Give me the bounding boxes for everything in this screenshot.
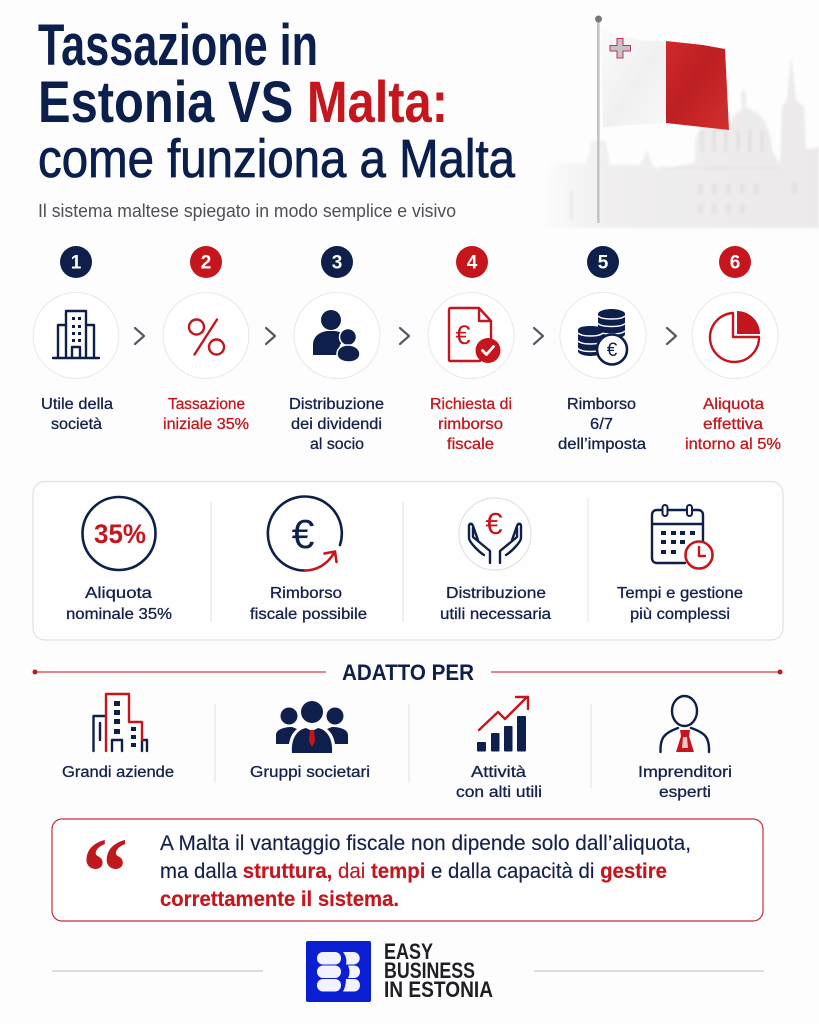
title: come funziona a Malta [38,129,516,189]
step 6: effettiva [703,416,763,433]
fact: profit distribution: Distribuzione [446,585,546,602]
step 5: dell’imposta [558,436,646,453]
step 3: al socio [310,436,364,453]
footer: logo Easy Business in Estonia: IN ESTONIA [384,977,493,1002]
fact: tax refund [250,497,367,623]
callout: quote: ma dalla struttura, dai tempi e dalla capacità di gestire [160,860,667,883]
Maltese cross [610,38,630,58]
callout: quote [52,818,763,925]
step 4: 4 [467,252,478,274]
flag of Malta with pole [595,16,729,223]
audience: corporate groups: Gruppi societari [250,764,370,781]
icon: pie chart [710,311,760,362]
step 1: 1 [71,252,82,274]
step 6: intorno al 5% [685,436,781,453]
step 4: fiscale [447,436,494,453]
heading: ADATTO PER: ADATTO PER [342,660,474,685]
audience: expert entrepreneurs [638,696,732,801]
title: Tassazione in [38,13,318,78]
audience: large companies [62,694,174,781]
fact: tax refund: € [292,511,315,557]
audience: expert entrepreneurs: Imprenditori [638,764,732,781]
arrow 4 [534,328,543,344]
panel: key facts [33,482,783,640]
step 2: Tassazione [168,396,245,413]
icon: percent [189,320,224,354]
step 3: dei dividendi [291,416,382,433]
arrow 2 [266,328,275,344]
step 5 [558,246,646,453]
arrow 1 [135,328,144,344]
step 4 [428,246,514,453]
step 5: 5 [598,252,609,274]
footer: logo Easy Business in Estonia: EASY [384,939,433,964]
fact: nominal rate: 35% [94,519,146,549]
step 3: 3 [332,252,342,274]
icon: coin stacks [578,309,627,364]
fact: profit distribution [440,498,551,623]
arrow 5 [667,328,676,344]
step 5: 6/7 [590,416,613,433]
step 6: 6 [730,252,740,274]
footer: logo Easy Business in Estonia: BUSINESS [384,958,475,983]
fact: timing and management [617,505,743,623]
title [38,13,516,189]
icon: coin stacks: € [607,340,618,361]
audience: high-profit activities: Attività [471,764,526,781]
callout: quote: correttamente il sistema. [160,888,399,911]
fact: profit distribution: € [485,506,503,541]
step 2 [163,246,249,433]
fact: nominal rate: nominale 35% [66,606,172,623]
step 4: rimborso [438,416,503,433]
step 2: 2 [201,252,211,274]
step 3 [289,246,384,453]
icon: quotation mark: “ [82,818,128,925]
audience: large companies: Grandi aziende [62,764,174,781]
icon: shareholders [313,310,360,362]
fact: timing and management: più complessi [630,606,730,623]
step 5: Rimborso [567,396,636,413]
audience: corporate groups [250,701,370,781]
background: Valletta skyline [540,55,819,228]
fact: timing and management: Tempi e gestione [617,585,743,602]
step 1: società [51,416,102,433]
step 1: Utile della [41,396,113,413]
arrow 3 [400,328,409,344]
icon: tax refund document [449,308,500,363]
fact: tax refund: Rimborso [270,585,342,602]
subtitle: Il sistema maltese spiegato in modo semplice e visivo [38,201,456,221]
audience: high-profit activities [456,697,542,801]
audience: expert entrepreneurs: esperti [659,784,711,801]
step 6: Aliquota [703,396,764,413]
step 1 [33,246,119,433]
fact: tax refund: fiscale possibile [250,606,367,623]
fact: profit distribution: utili necessaria [440,606,551,623]
step 3: Distribuzione [289,396,384,413]
step 2: iniziale 35% [163,416,249,433]
fact: nominal rate [66,497,172,623]
callout: quote: A Malta il vantaggio fiscale non dipende solo dall’aliquota, [160,832,691,855]
step 6 [685,246,781,453]
audience: high-profit activities: con alti utili [456,784,542,801]
title: Estonia VS Malta: [38,70,448,135]
footer: logo Easy Business in Estonia [52,939,764,1002]
icon: tax refund document: € [455,320,471,350]
step 4: Richiesta di [430,396,512,413]
fact: nominal rate: Aliquota [85,585,152,602]
icon: office building [53,311,99,358]
heading: ADATTO PER [32,660,782,685]
